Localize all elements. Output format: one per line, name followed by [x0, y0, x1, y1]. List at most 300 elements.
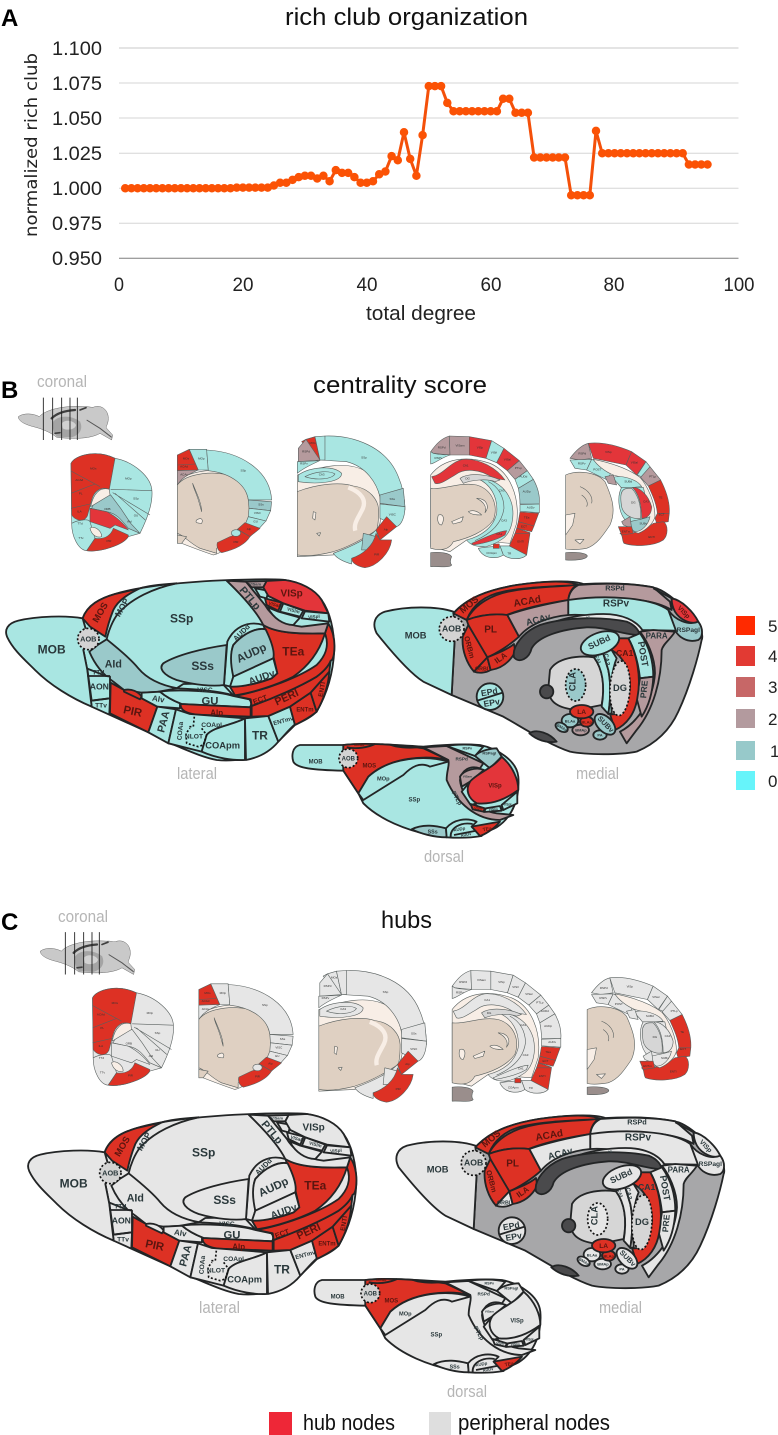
coronal sections: TTd [77, 522, 83, 526]
coronal sections: ECT [680, 1047, 686, 1051]
x axis tick labels: 20 [232, 274, 254, 296]
lateral region labels: SSp [192, 1146, 215, 1160]
coronal sections: ENTm [622, 530, 631, 534]
coronal sections: VISal [631, 461, 638, 465]
icon: mini brain with coronal cut lines [18, 398, 113, 440]
coronal sections: RSPd [578, 451, 587, 455]
medial brain map [396, 1115, 724, 1288]
lateral region labels: MOS [113, 1135, 132, 1158]
medial region labels: ORBm [484, 1169, 499, 1194]
coronal sections: CA1 [463, 463, 469, 467]
medial region labels: MOS [458, 594, 480, 615]
medial region labels: BLAa [587, 1252, 598, 1257]
medial region labels: PA [619, 1267, 625, 1272]
coronal sections: GU [275, 1054, 279, 1058]
coronal sections: SSp [133, 496, 139, 500]
medial region labels: BMAp [575, 728, 587, 733]
coronal sections: ACAd [97, 1012, 105, 1016]
medial region labels: AOB [464, 1158, 483, 1168]
medial region labels: PL [506, 1158, 519, 1169]
coronal sections: DG [653, 1035, 658, 1039]
medial region labels: POST [658, 1175, 672, 1202]
coronal sections: AUDd [519, 474, 528, 478]
coronal sections: SSp [383, 990, 389, 994]
coronal sections: SSp [240, 469, 246, 473]
lateral region labels: AIv [151, 694, 166, 705]
coronal sections: ENTl [539, 1074, 546, 1078]
coronal sections: GU [155, 1048, 160, 1052]
lateral region labels: SSp [170, 612, 193, 626]
dorsal region labels: VISpl [525, 1338, 534, 1342]
dorsal region labels: MOB [309, 759, 323, 765]
coronal sections: MOp [220, 991, 226, 995]
lateral region labels: ECT [274, 1227, 291, 1240]
coronal sections: GU [253, 519, 258, 523]
coronal sections: RSPv [300, 461, 308, 465]
coronal sections: MOp [125, 476, 132, 480]
coronal sections: PTLp [649, 474, 657, 478]
dorsal region labels: SSp [408, 798, 420, 804]
dorsal region labels: RSPagl [504, 1286, 518, 1291]
medial region labels: BMAp [597, 1262, 609, 1267]
coronal sections: MOs [309, 441, 316, 445]
coronal sections: CA3 [499, 489, 505, 493]
medial caption: medial [599, 1298, 642, 1317]
dorsal region labels: VISlm [489, 808, 498, 812]
coronal sections: VISal [504, 457, 511, 461]
coronal sections: RSPv [435, 456, 443, 460]
dorsal caption: dorsal [447, 1382, 487, 1401]
lateral region labels: AIp [232, 1242, 245, 1251]
coronal sections: ENTl [517, 539, 524, 543]
medial region labels: DG [635, 1217, 649, 1227]
lateral region labels: ENTl [318, 681, 327, 698]
medial region labels: SUBd [608, 1167, 634, 1186]
coronal sections: SSs [411, 1031, 417, 1035]
lateral region labels: SSs [191, 659, 214, 673]
medial region labels: BMAa [556, 723, 569, 733]
coronal sections: GU [134, 514, 138, 518]
coronal sections: AIp [405, 1062, 410, 1066]
coronal sections: AId [127, 519, 132, 523]
medial region labels: SUBv [596, 714, 617, 735]
medial region labels: CA2 [624, 1187, 632, 1201]
coronal sections: CA3 [319, 473, 325, 477]
dorsal region labels: AUDp [475, 1361, 488, 1368]
coronal sections: TTd [99, 1056, 104, 1060]
dorsal brain map [314, 1278, 541, 1373]
coronal sections: DG [487, 1011, 492, 1015]
medial region labels [427, 1118, 722, 1272]
medial region labels: RSPagl [699, 1161, 722, 1168]
lateral region labels: AUDp [235, 642, 269, 666]
lateral region labels: TR [274, 1262, 290, 1276]
y axis tick labels [52, 38, 102, 270]
x axis tick labels: 80 [604, 274, 625, 296]
medial region labels: BLAp [581, 719, 593, 724]
dorsal region labels: ACAd [354, 743, 364, 747]
coronal sections: AIp [384, 528, 389, 532]
lateral region labels: AIp [210, 708, 223, 717]
coronal sections: CA3 [501, 519, 507, 523]
panel letter C: C [1, 909, 18, 936]
coronal sections: SUBv [639, 522, 648, 526]
dorsal region labels: RSPv [463, 746, 473, 750]
lateral region labels: TTv [117, 1236, 129, 1243]
lateral brain map [28, 1113, 356, 1294]
coronal sections: ORB [104, 507, 111, 511]
coronal sections: CA1 [518, 1066, 524, 1070]
grid lines [119, 48, 738, 258]
lateral region labels: VISlm [286, 606, 300, 615]
y axis tick labels: 1.075 [52, 73, 102, 95]
medial region labels: BLAp [603, 1253, 615, 1258]
coronal sections: ACAd [180, 465, 188, 469]
lateral region labels: AON [112, 1215, 131, 1225]
dorsal region labels: SSs [450, 1364, 460, 1370]
lateral region labels: AUDp [257, 1176, 291, 1200]
coronal sections: ENTl [648, 535, 655, 539]
dorsal region labels: VISam [485, 1309, 494, 1313]
lateral region labels: TTd [92, 669, 104, 676]
coronal sections: VISal [525, 992, 533, 996]
dorsal region labels: TEa [504, 1361, 515, 1368]
medial region labels: CA1 [616, 648, 633, 658]
coronal sections: VISrl [512, 985, 519, 989]
lateral region labels: PIR [144, 1238, 165, 1254]
coronal sections: RSPv [599, 996, 607, 1000]
lateral brain map [6, 579, 334, 760]
legend: hub and peripheral nodes: peripheral nodes [458, 1410, 610, 1435]
lateral region labels: VISC [197, 687, 213, 694]
coronal sections: AUDd [541, 1009, 549, 1013]
coronal sections: AUDv [527, 505, 535, 509]
coronal sections: AUDv [548, 1040, 557, 1044]
dorsal region labels: SSs [428, 829, 438, 835]
coronal sections: ORB [126, 1041, 132, 1045]
coronal sections: COApm [508, 1085, 519, 1089]
coronal sections: SSp [262, 1003, 268, 1007]
coronal sections: PIR [374, 553, 380, 557]
lateral region labels: ENTl [340, 1215, 349, 1232]
coronal sections: POST [593, 467, 602, 471]
panel letter B: B [1, 377, 18, 404]
medial region labels: RSPd [605, 584, 625, 593]
lateral region labels: MOB [38, 642, 66, 656]
dorsal region labels: RSPd [477, 1292, 490, 1297]
medial region labels: RSPagl [677, 627, 700, 634]
lateral region labels: VISp [303, 1123, 325, 1134]
lateral region labels: AId [105, 659, 122, 671]
dorsal region labels: PTLp [472, 1326, 485, 1342]
coronal sections: ECT [521, 525, 527, 529]
medial region labels: EPd [480, 686, 498, 698]
dorsal region labels: VISam [463, 774, 472, 778]
lateral region labels: AUDd [231, 622, 252, 643]
coronal sections: TTv [100, 1070, 106, 1074]
lateral region labels: PIR [122, 704, 143, 720]
x axis tick labels: 60 [480, 274, 502, 296]
medial region labels: ORBl [497, 1201, 511, 1207]
dorsal region labels: VISal [496, 1341, 504, 1345]
coronal sections: PIR [233, 540, 239, 544]
coronal sections: VISp [605, 450, 612, 454]
section heading: centrality score [313, 372, 487, 399]
coronal sections: DG [631, 500, 636, 504]
legend: hub and peripheral nodes [269, 1410, 610, 1435]
coronal sections [71, 436, 669, 568]
lateral region labels: PERI [295, 1221, 323, 1242]
medial region labels: LA [577, 709, 586, 716]
lateral region labels: VISam [271, 1116, 284, 1121]
coronal sections: CA3 [643, 499, 649, 503]
lateral region labels: PERI [273, 687, 301, 708]
medial region labels: PA [597, 733, 603, 738]
x axis tick labels: 40 [356, 274, 378, 296]
dorsal region labels: VISal [474, 806, 482, 810]
lateral region labels: SSs [213, 1193, 236, 1207]
dorsal region labels: VISp [510, 1318, 524, 1324]
coronal sections: PTLp [671, 1009, 678, 1013]
legend: centrality score [736, 616, 778, 791]
dorsal region labels: AUDv [482, 1366, 494, 1373]
lateral region labels: GU [201, 696, 218, 708]
lateral region labels: VISp [281, 589, 303, 600]
dorsal region labels: VISlm [511, 1343, 520, 1347]
coronal sections: TR [529, 1086, 534, 1090]
coronal sections: SSs [258, 502, 264, 506]
coronal sections: SUBd [646, 1014, 654, 1018]
coronal sections: TEa [524, 516, 530, 520]
lateral region labels: TEa [304, 1179, 327, 1193]
x axis tick labels: 0 [114, 274, 124, 296]
medial region labels: CA1 [638, 1182, 655, 1192]
coronal sections: MOp [147, 1011, 153, 1015]
coronal sections: ACAv [202, 1007, 210, 1011]
panel B: centrality score [1, 372, 778, 866]
lateral region labels: TEa [282, 645, 305, 659]
coronal sections: AIp [247, 527, 252, 531]
coronal sections: AId [149, 1054, 153, 1058]
dorsal region labels: AOB [342, 756, 356, 762]
medial region labels: ORBl [475, 667, 489, 673]
coronal sections: RSPd [600, 986, 608, 990]
medial region labels: CLA [568, 672, 578, 691]
lateral region labels: AUDv [269, 1202, 299, 1222]
coronal sections: TTv [78, 536, 84, 540]
lateral region labels: VISC [219, 1221, 235, 1228]
legend: centrality score: 5 [768, 617, 777, 636]
dorsal region labels: VISp [488, 783, 502, 789]
coronal sections: VISp [498, 980, 505, 984]
coronal sections: DG [465, 477, 471, 481]
medial region labels: MOS [480, 1128, 502, 1149]
coronal sections: VISp [627, 984, 633, 988]
lateral region labels: ENTm [318, 1242, 336, 1248]
medial region labels: VISp [676, 605, 691, 620]
dorsal region labels: SSp [430, 1333, 442, 1339]
coronal sections: SSp [361, 455, 367, 459]
coronal sections: MOs [183, 456, 190, 460]
lateral region labels: TTd [114, 1203, 126, 1210]
dorsal region labels: MOp [399, 1312, 412, 1318]
coronal sections: ILA [77, 510, 82, 514]
lateral region labels: AOB [102, 1169, 118, 1178]
medial region labels: IG [608, 1149, 612, 1154]
coronal sections: RSPd [302, 449, 310, 453]
lateral region labels: VISpl [330, 1148, 342, 1154]
medial region labels: CA2 [602, 653, 610, 667]
y axis tick labels: 1.025 [52, 143, 102, 165]
lateral region labels: AOB [80, 635, 96, 644]
coronal sections: PIR [396, 1087, 401, 1091]
coronal sections: ECT [542, 1059, 549, 1063]
lateral region labels: ENTm [296, 708, 314, 714]
lateral region labels: AUDv [247, 668, 277, 688]
lateral region labels: MOP [135, 1130, 153, 1153]
lateral region labels: COApl [201, 722, 222, 729]
section heading: hubs [381, 907, 432, 934]
coronal sections: AUDp [544, 1024, 552, 1028]
medial region labels: MOB [427, 1164, 449, 1174]
coronal sections: RSPd [459, 980, 467, 984]
medial region labels: BLAa [565, 718, 576, 723]
coronal sections: MOp [198, 456, 205, 460]
dorsal region labels: RSPagl [482, 751, 496, 756]
coronal sections: RSPv [456, 990, 464, 994]
coronal sections: ENTm [643, 1064, 652, 1068]
y axis tick labels: 1.100 [52, 38, 102, 60]
coronal sections: CA3 [340, 1007, 346, 1011]
medial region labels: SUBv [618, 1248, 639, 1269]
coronal sections: RSPd [324, 984, 332, 988]
coronal sections: SSs [390, 497, 396, 501]
chart title: rich club organization [285, 4, 528, 31]
y axis tick labels: 1.000 [52, 178, 102, 200]
dorsal region labels: ACAd [376, 1278, 386, 1282]
lateral region labels: ECT [252, 693, 269, 706]
coronal sections: VISC [254, 511, 262, 515]
medial region labels: RSPd [627, 1118, 647, 1127]
dorsal region labels [309, 743, 512, 838]
medial region labels: BMAa [578, 1257, 591, 1267]
medial region labels: PARA [646, 631, 668, 640]
medial brain map [374, 581, 702, 754]
lateral region labels: ENTmv [273, 716, 295, 727]
coronal sections: PTLp [536, 1000, 544, 1004]
coronal sections: VISam [456, 443, 465, 447]
coronal sections: RSPd [438, 446, 446, 450]
medial region labels: PL [484, 624, 497, 635]
medial region labels: ILA [515, 1185, 531, 1200]
coronal sections: VISC [389, 512, 397, 516]
coronal sections: SSs [280, 1037, 286, 1041]
coronal sections: CA3 [523, 1053, 529, 1057]
medial region labels: RSPv [625, 1133, 651, 1144]
coronal sections: PIR [128, 1073, 134, 1077]
lateral region labels: COApm [227, 1274, 262, 1284]
coronal sections: SUBd [624, 479, 633, 483]
coronal sections: AUDp [523, 489, 531, 493]
lateral region labels: MOP [113, 596, 131, 619]
coronal sections: TE [680, 1030, 684, 1034]
coronal sections: VISC [275, 1045, 283, 1049]
coronal sections: ACAv [180, 472, 188, 476]
lateral region labels: COApl [223, 1256, 244, 1263]
y axis tick labels: 1.050 [52, 108, 102, 130]
dorsal region labels: VISpl [503, 803, 512, 807]
panel letter A: A [1, 5, 18, 32]
lateral caption: lateral [177, 764, 217, 783]
medial region labels: ACAv [547, 1145, 574, 1162]
lateral region labels: VISlm [308, 1140, 322, 1149]
x axis title: total degree [366, 303, 476, 325]
dorsal region labels: AOB [364, 1291, 378, 1297]
coronal sections: TR [507, 551, 512, 555]
medial region labels: PRE [660, 1214, 672, 1233]
x axis tick labels [114, 274, 755, 296]
lateral region labels: AUDd [253, 1156, 274, 1177]
coronal sections: PL [79, 491, 83, 495]
coronal sections [92, 970, 691, 1102]
coronal sections: PL [100, 1026, 104, 1030]
lateral region labels: PAA [155, 709, 173, 734]
y axis tick labels: 0.950 [52, 248, 102, 270]
panel A: rich club chart [1, 4, 755, 325]
dorsal region labels: MOS [385, 1298, 398, 1304]
medial region labels: POST [636, 641, 650, 668]
coronal sections: VISal [652, 995, 660, 999]
lateral region labels [38, 582, 327, 750]
coronal sections: CA3 [665, 1034, 671, 1038]
coronal sections: CA1 [496, 532, 503, 536]
coronal sections: RSPv [578, 461, 586, 465]
lateral region labels: NLOT [185, 733, 203, 740]
medial region labels: VISp [698, 1139, 713, 1154]
dorsal region labels: MOB [331, 1294, 345, 1300]
medial region labels: AOB [442, 624, 461, 634]
medial region labels: EPv [483, 696, 501, 709]
medial region labels: CLA [590, 1206, 600, 1225]
lateral region labels: TR [252, 728, 268, 742]
medial region labels: DG [613, 683, 627, 693]
coronal sections: PIR [255, 1074, 261, 1078]
lateral region labels: PTLp [237, 584, 263, 613]
coronal sections: ACAd [75, 478, 84, 482]
coronal sections: RSPv [322, 996, 330, 1000]
lateral region labels: AON [90, 681, 109, 691]
dorsal region labels: PTLp [450, 791, 463, 807]
lateral region labels: VISal [290, 1135, 302, 1142]
medial region labels: PARA [668, 1165, 690, 1174]
coronal caption: coronal [58, 907, 108, 926]
legend: centrality score: 0 [768, 772, 777, 791]
data line [125, 86, 707, 195]
medial region labels: IG [586, 615, 590, 620]
x axis tick labels: 100 [724, 274, 755, 296]
dorsal brain map [292, 743, 519, 838]
lateral region labels: MOB [60, 1176, 88, 1190]
coronal sections: VISC [410, 1047, 418, 1051]
coronal sections: MOs [204, 991, 211, 995]
dorsal region labels: RSPd [455, 757, 468, 762]
legend: centrality score: 3 [768, 678, 777, 697]
lateral caption: lateral [199, 1298, 240, 1317]
y axis title: normalized rich club [22, 53, 41, 237]
medial region labels: ORBm [462, 635, 477, 660]
coronal sections: ECT [659, 512, 665, 516]
lateral region labels: VISam [249, 582, 262, 587]
